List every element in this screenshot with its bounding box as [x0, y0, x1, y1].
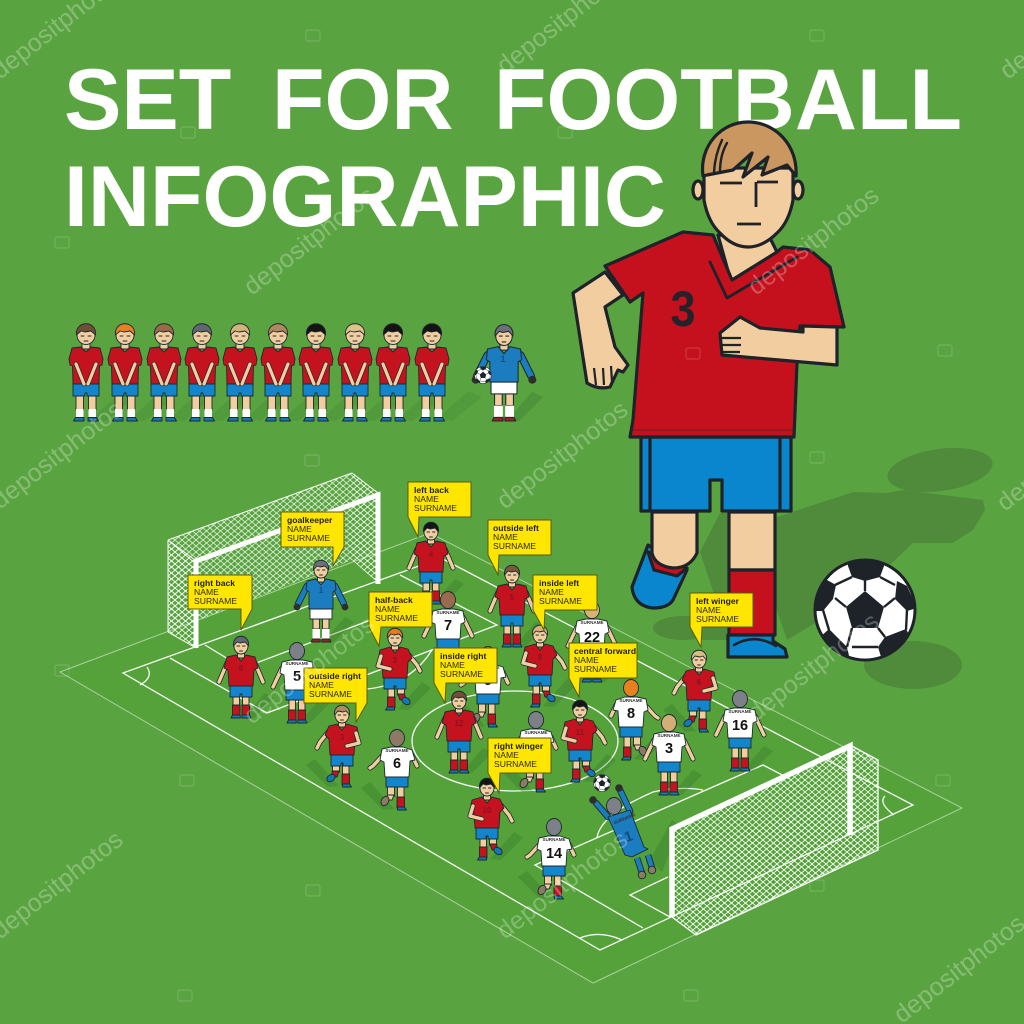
player: half-back: 2 — [393, 656, 398, 665]
player: white 3 — [645, 714, 702, 795]
player: outside left: 5 — [510, 593, 515, 602]
player: white hidden: SURNAME — [524, 730, 548, 735]
callout: right winger: NAME — [494, 750, 519, 760]
player: white 9: 9 — [484, 673, 492, 689]
callout: central forward — [569, 643, 637, 697]
shadow: big player — [653, 442, 995, 640]
player: goalkeeper: 1 — [319, 586, 324, 595]
big football — [813, 560, 917, 660]
callout: outside left — [488, 520, 551, 575]
callout: outside left: outside left — [493, 523, 539, 533]
player: inside left: 9 — [538, 653, 543, 662]
player: goalkeeper — [294, 560, 354, 642]
callout: left back: left back — [414, 485, 449, 495]
player: white 14 — [518, 818, 574, 899]
callout: right winger: SURNAME — [494, 759, 537, 769]
callout: right winger — [488, 738, 551, 793]
player: white 22: 22 — [584, 630, 600, 646]
player: white 5: 5 — [293, 669, 301, 685]
player: white 16: SURNAME — [728, 709, 752, 714]
shirt — [605, 232, 844, 437]
lineup row: ten outfield players — [69, 324, 482, 421]
player: right winger: 10 — [483, 806, 492, 815]
callout: goalkeeper: NAME — [287, 524, 312, 534]
callout: left winger — [690, 593, 753, 647]
player: inside right — [437, 691, 492, 773]
player: white 7 — [424, 592, 481, 672]
player: outside right: 3 — [340, 733, 345, 742]
callout: inside left — [533, 575, 597, 630]
shadow: ball — [864, 641, 962, 689]
player: diving goalkeeper: 1 — [622, 828, 635, 846]
player: white 14: 14 — [546, 846, 562, 862]
callout: right back: SURNAME — [194, 596, 237, 606]
player: white 9: SURNAME — [476, 665, 500, 670]
callout: central forward: NAME — [574, 655, 599, 665]
player: left winger — [663, 650, 716, 732]
watermarks: depositphotos — [238, 181, 380, 301]
player: outside left — [490, 565, 545, 647]
back leg and shoe — [632, 512, 697, 608]
callout: left winger: SURNAME — [696, 614, 739, 624]
player: left back — [409, 522, 464, 604]
player: central forward: 11 — [576, 728, 585, 737]
callout: left back — [408, 482, 471, 537]
player: white 8 — [611, 680, 667, 760]
callout: outside right: NAME — [309, 680, 334, 690]
player: central forward — [563, 700, 616, 782]
right arm — [594, 317, 837, 385]
player: diving goalkeeper: SURNAME — [613, 812, 636, 825]
title: SET — [64, 52, 231, 148]
player: white 9 — [452, 646, 508, 727]
neck — [718, 235, 777, 285]
player: white 3: 3 — [665, 741, 673, 757]
callout: inside right — [434, 648, 497, 703]
callout: right back — [188, 575, 252, 630]
standing leg and shoe — [728, 512, 787, 657]
callout: half-back: SURNAME — [375, 613, 418, 623]
callout: left back: SURNAME — [414, 503, 457, 513]
callout: outside left: SURNAME — [493, 541, 536, 551]
watermarks: depositphotos — [742, 181, 884, 301]
player: inside left — [523, 625, 576, 707]
left arm — [573, 272, 628, 388]
player: white 6: SURNAME — [385, 748, 409, 753]
callout: central forward: central forward — [574, 646, 636, 656]
player: white 6: 6 — [393, 756, 401, 772]
callout: right back: right back — [194, 578, 235, 588]
player: white 8: SURNAME — [619, 698, 643, 703]
player: outside right — [306, 705, 359, 787]
callout: outside left: NAME — [493, 532, 518, 542]
collar — [710, 252, 797, 298]
callout: left back: NAME — [414, 494, 439, 504]
callout: outside right: SURNAME — [309, 689, 352, 699]
goal: near right — [672, 745, 878, 935]
match ball — [593, 774, 611, 792]
player: inside right: 12 — [455, 719, 464, 728]
big player head — [693, 122, 803, 247]
big player — [573, 122, 844, 657]
player: white 14: SURNAME — [542, 837, 566, 842]
watermarks: depositphotos — [491, 395, 633, 515]
callout: inside right: inside right — [440, 651, 486, 661]
pitch markings — [60, 533, 962, 983]
player: right back: 8 — [239, 664, 244, 673]
callouts — [188, 482, 753, 793]
callout: inside right: SURNAME — [440, 669, 483, 679]
callout: goalkeeper — [281, 512, 344, 566]
lineup goalkeeper with ball — [472, 325, 543, 421]
callout: inside left: inside left — [539, 578, 579, 588]
watermarks: depositphotos — [742, 607, 884, 727]
callout: goalkeeper: SURNAME — [287, 533, 330, 543]
player: white 16: 16 — [732, 718, 748, 734]
title: FOR — [272, 52, 454, 148]
callout: right winger: right winger — [494, 741, 544, 751]
player: half-back — [378, 628, 431, 710]
callout: goalkeeper: goalkeeper — [287, 515, 333, 525]
player: right back — [219, 636, 274, 718]
player: left back: 4 — [429, 550, 434, 559]
team on pitch — [219, 522, 773, 899]
player: left winger: 6 — [697, 678, 702, 687]
callout: half-back: half-back — [375, 595, 413, 605]
callout: left winger: NAME — [696, 605, 721, 615]
lineup goalkeeper with ball: 1 — [500, 354, 506, 364]
player: white 22 — [568, 602, 625, 682]
title: INFOGRAPHIC — [64, 149, 666, 245]
callout: outside right — [304, 668, 367, 722]
player: white 5: SURNAME — [285, 661, 309, 666]
player: white 8: 8 — [627, 706, 635, 722]
player: diving goalkeeper — [589, 784, 680, 879]
watermarks: depositphotos — [238, 610, 380, 730]
shorts — [641, 437, 791, 511]
player: white 7: 7 — [444, 618, 452, 634]
player: white 6 — [361, 730, 417, 810]
player: white 16 — [716, 690, 773, 771]
callout: right back: NAME — [194, 587, 219, 597]
player: white hidden — [500, 712, 556, 792]
callout: central forward: SURNAME — [574, 664, 617, 674]
player: white 7: SURNAME — [436, 610, 460, 615]
callout: left winger: left winger — [696, 596, 740, 606]
callout: inside left: SURNAME — [539, 596, 582, 606]
goal: far left — [168, 473, 378, 648]
callout: outside right: outside right — [309, 671, 361, 681]
player: white 22: SURNAME — [580, 620, 604, 625]
callout: half-back — [369, 592, 432, 646]
shirt number: 3 — [670, 281, 696, 337]
callout: half-back: NAME — [375, 604, 400, 614]
callout: inside right: NAME — [440, 660, 465, 670]
player: white 3: SURNAME — [657, 733, 681, 738]
title: FOOTBALL — [494, 52, 962, 148]
player: right winger — [470, 778, 523, 860]
player: white 5 — [273, 642, 330, 723]
watermarks: depositphotos — [491, 825, 633, 945]
callout: inside left: NAME — [539, 587, 564, 597]
